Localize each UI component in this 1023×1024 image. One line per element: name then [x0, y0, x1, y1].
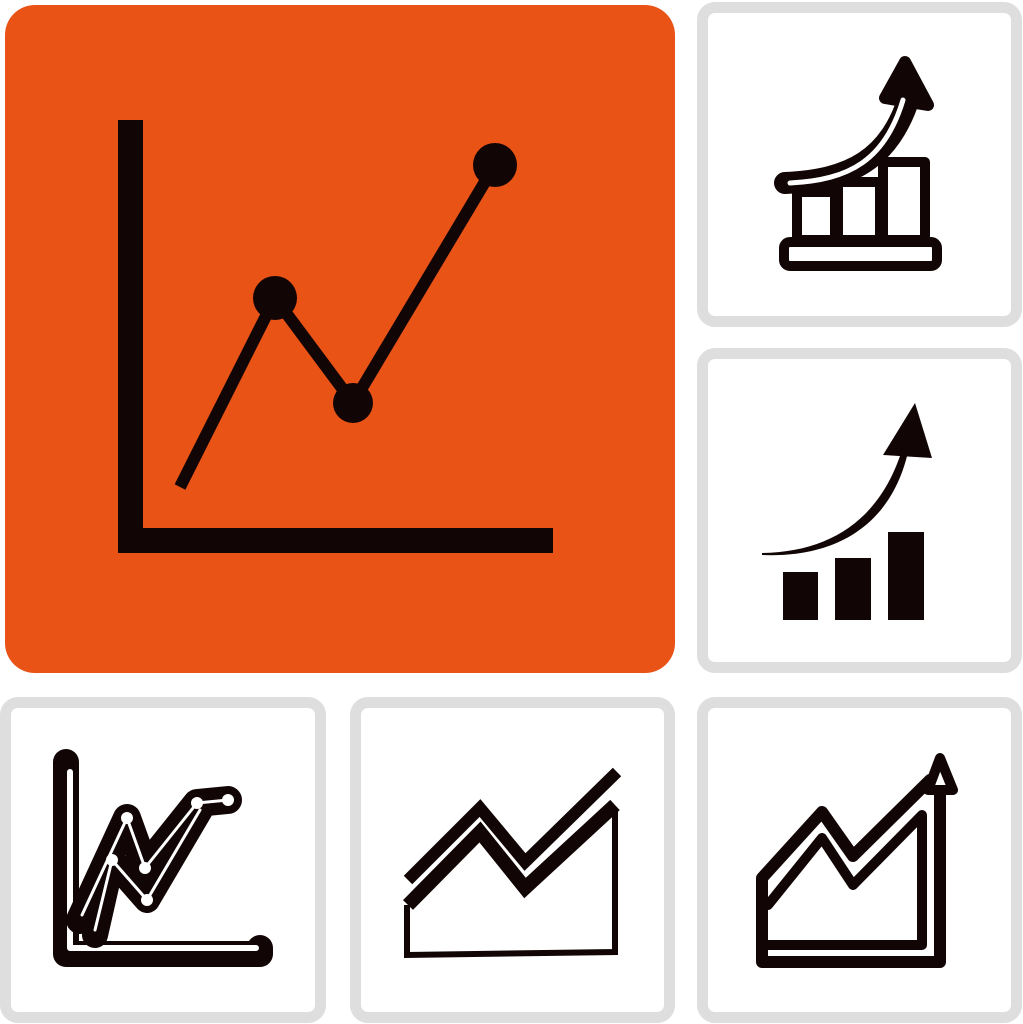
icon: zigzag area chart — [407, 772, 617, 955]
panel: outlined line chart with dots — [0, 697, 326, 1023]
icon: outlined bars with arrow — [784, 62, 937, 266]
panel: orange line chart tile — [5, 5, 675, 673]
icon: outlined L with dotted lines — [66, 762, 260, 954]
panel: zigzag area chart — [350, 697, 675, 1023]
panel: area chart with arrow — [697, 697, 1022, 1023]
panel: bar chart with outlined arrow — [697, 2, 1022, 327]
icon: big line chart — [118, 120, 553, 553]
icon: area chart with arrow — [762, 758, 953, 962]
icon: solid bars with arrow — [762, 403, 932, 620]
panel: solid bars with arrow — [697, 348, 1022, 673]
